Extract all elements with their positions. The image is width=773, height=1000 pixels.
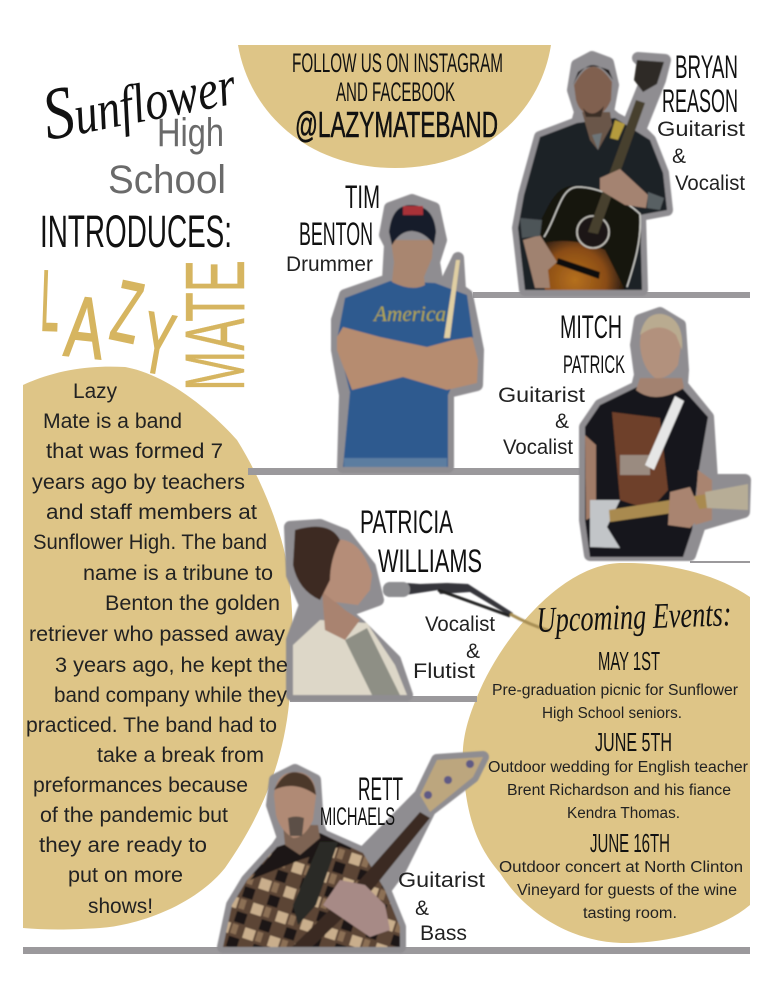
name: Bryan Reason: [662, 49, 738, 119]
gold events circle: [463, 563, 750, 943]
gold banner: [238, 45, 551, 168]
name: Patricia Williams: PATRICIA: [360, 504, 453, 540]
name: Rett Michaels: [320, 771, 403, 831]
event: June 16th: JUNE 16TH: [590, 828, 670, 858]
shirt logo: America: [372, 301, 446, 326]
text: follow us: FOLLOW US ON INSTAGRAM: [292, 48, 503, 78]
event: June 16th: [499, 828, 743, 922]
story text: they are ready to: [39, 834, 207, 857]
story text: Mate is a band: [43, 410, 182, 433]
event: June 5th: JUNE 5TH: [595, 727, 672, 757]
story text: preformances because: [33, 774, 248, 797]
story text: put on more: [68, 864, 183, 887]
role: Bryan: [657, 118, 745, 195]
band name logo: A: [61, 278, 109, 378]
role: Patricia: &: [466, 640, 480, 663]
story text: name is a tribune to: [83, 562, 273, 585]
role: Mitch: Vocalist: [503, 436, 573, 459]
event: June 5th: [488, 727, 748, 822]
story text: practiced. The band had to: [26, 714, 277, 737]
role: Patricia: Flutist: [413, 660, 475, 683]
name: Rett Michaels: MICHAELS: [320, 803, 395, 831]
story text: of the pandemic but: [40, 804, 228, 827]
name: Tim Benton: BENTON: [299, 216, 373, 252]
title: High: High: [157, 111, 224, 155]
title: School: School: [108, 158, 226, 202]
name: Rett Michaels: RETT: [358, 771, 403, 807]
event: May 1st: [492, 646, 738, 722]
story text: Benton the golden: [105, 592, 280, 615]
role: Tim: Drummer: [286, 253, 373, 276]
story text: [26, 380, 288, 918]
role: Bryan: Guitarist: [657, 118, 745, 141]
event: June 16th: tasting room.: [583, 905, 677, 922]
photo: Rett Michaels: [223, 757, 483, 947]
event: May 1st: Pre-graduation picnic for Sunflower: [492, 682, 738, 699]
role: Bryan: &: [672, 145, 686, 168]
role: Mitch: &: [555, 410, 569, 433]
role: Bryan: Vocalist: [675, 172, 745, 195]
story text: band company while they: [54, 684, 287, 707]
story text: shows!: [88, 895, 153, 918]
name: Tim Benton: TIM: [345, 179, 380, 215]
story text: years ago by teachers: [32, 471, 245, 494]
photo: Mitch Patrick: [585, 313, 748, 557]
role: Rett: Guitarist: [398, 869, 485, 892]
name: Patricia Williams: [360, 504, 482, 579]
photo: Tim Benton: [337, 200, 478, 467]
role: Rett: [398, 869, 485, 945]
role: Patricia: Vocalist: [425, 613, 495, 636]
divider lines: [23, 292, 750, 954]
event: June 5th: Outdoor wedding for English teacher: [488, 759, 748, 776]
role: Patricia: [413, 613, 495, 683]
story text: Sunflower High. The band: [33, 531, 267, 554]
text: follow us: AND FACEBOOK: [336, 77, 455, 107]
story text: retriever who passed away: [29, 623, 286, 646]
text: follow us: [292, 48, 503, 145]
event: May 1st: MAY 1ST: [598, 646, 660, 676]
story text: and staff members at: [46, 501, 257, 524]
event: June 5th: Kendra Thomas.: [567, 805, 680, 822]
name: Mitch Patrick: MITCH: [560, 309, 622, 345]
role: Mitch: Guitarist: [498, 384, 585, 407]
story text: take a break from: [97, 744, 264, 767]
name: Mitch Patrick: [560, 309, 625, 379]
text: follow us: @LAZYMATEBAND: [295, 104, 498, 145]
band name logo: Z: [104, 263, 150, 362]
event: June 16th: Outdoor concert at North Clinton: [499, 859, 743, 876]
band name logo: L: [39, 253, 61, 350]
event: June 5th: Brent Richardson and his fiance: [507, 782, 731, 799]
heading: introduces: INTRODUCES:: [40, 206, 232, 257]
band name logo: Y: [135, 294, 181, 394]
band name logo: MATE: [168, 260, 262, 391]
name: Patricia Williams: WILLIAMS: [378, 543, 482, 579]
photo: Patricia Williams: [290, 525, 550, 695]
title: Sunflower: Sunflower: [36, 39, 242, 157]
event: May 1st: High School seniors.: [542, 705, 682, 722]
role: Mitch: [498, 384, 585, 459]
gold story ellipse: [23, 367, 293, 929]
event: June 16th: Vineyard for guests of the wine: [517, 882, 737, 899]
name: Tim Benton: [299, 179, 380, 252]
band name logo: [39, 253, 262, 394]
name: Mitch Patrick: PATRICK: [563, 351, 625, 379]
role: Rett: &: [415, 897, 429, 920]
story text: Lazy: [73, 380, 117, 403]
story text: that was formed 7: [46, 440, 223, 463]
photo: Bryan Reason: [518, 57, 667, 290]
story text: 3 years ago, he kept the: [55, 654, 288, 677]
role: Rett: Bass: [420, 922, 467, 945]
